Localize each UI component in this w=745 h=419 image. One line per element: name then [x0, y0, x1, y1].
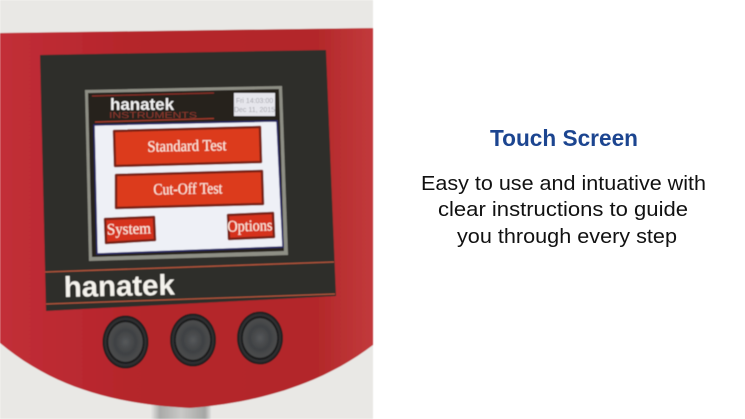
date and time box: Fri 14:03:00 [236, 98, 273, 105]
panel orange lines [45, 262, 335, 304]
button: Options [227, 213, 274, 239]
button: Standard Test: Standard Test [147, 137, 227, 156]
description text: Easy to use and intuative with [421, 173, 706, 195]
description text: clear instructions to guide [438, 199, 688, 221]
description text: you through every step [457, 226, 677, 248]
date and time box [234, 93, 275, 116]
dark control panel [40, 50, 336, 311]
button: Cut-Off Test: Cut-Off Test [153, 180, 223, 199]
screen white area [94, 121, 283, 254]
button: System [105, 217, 155, 243]
heading: Touch Screen: Touch Screen [490, 125, 638, 151]
screen logo: hanatek: hanatek [110, 96, 175, 114]
instrument support pole [151, 404, 211, 419]
photo backdrop [0, 0, 373, 419]
screen logo subtitle: INSTRUMENTS [109, 111, 197, 120]
physical knob left [102, 316, 148, 368]
description text [421, 173, 706, 248]
panel logo: hanatek: hanatek [63, 270, 176, 304]
screen header line top [92, 93, 214, 96]
button: Options: Options [227, 217, 273, 236]
physical knob centre [170, 314, 216, 366]
button: System: System [107, 220, 152, 239]
button: Standard Test [114, 127, 261, 166]
screen header line bottom [95, 118, 214, 122]
date and time box: Dec 11, 2015 [234, 107, 275, 114]
photo: hanatek instrument touch screen [0, 0, 373, 419]
white text panel background [373, 0, 745, 419]
physical knob right [237, 312, 283, 364]
touch screen frame [85, 86, 288, 261]
button: Cut-Off Test [116, 171, 263, 208]
red instrument body [0, 28, 373, 408]
touch screen dark inner [88, 89, 284, 257]
